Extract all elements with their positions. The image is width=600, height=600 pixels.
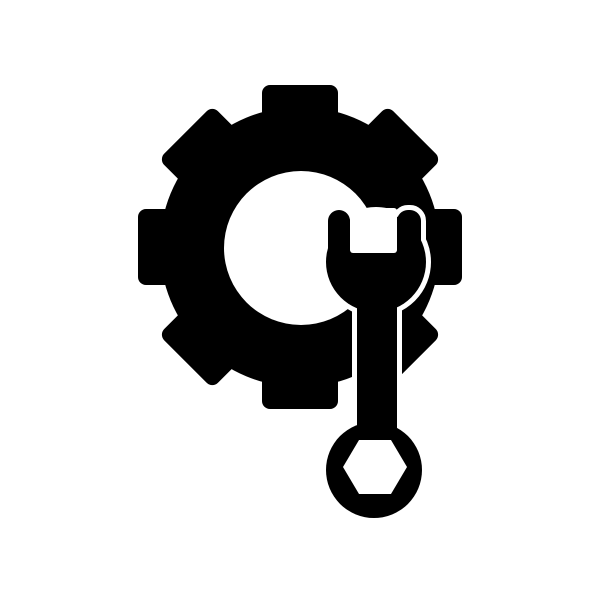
icon: wrench (326, 208, 426, 518)
icon: gear (138, 85, 462, 409)
